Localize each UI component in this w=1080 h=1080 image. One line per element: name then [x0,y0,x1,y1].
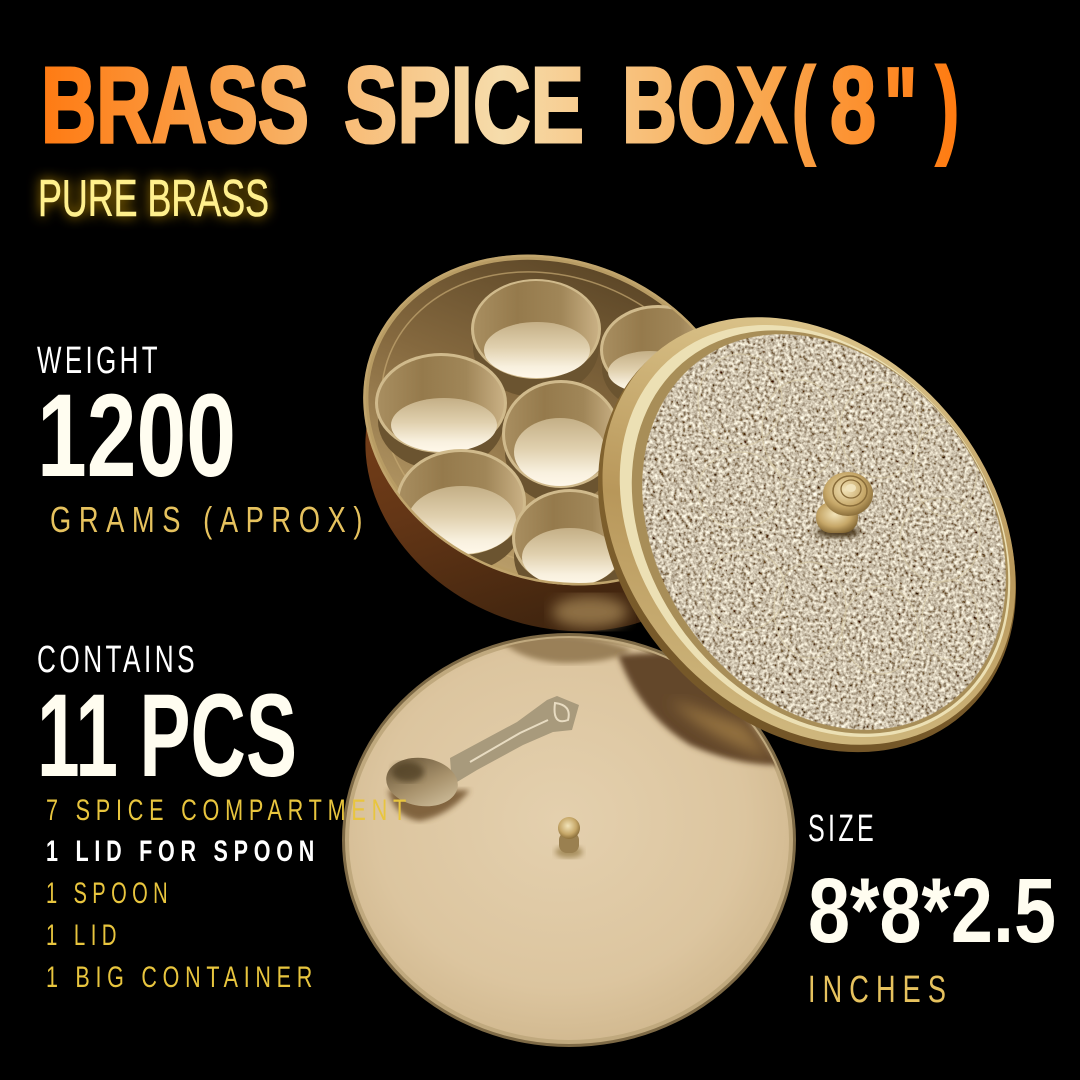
inner wall [320,205,786,635]
photo: bottom plate lid with spoon [342,633,796,1047]
size block [808,808,1056,1011]
title: ) [936,45,959,166]
contains label: CONTAINS [37,639,198,681]
title: 8 [830,44,876,165]
size label: SIZE [808,808,877,850]
compartment: center [502,380,620,504]
piece count: 11 PCS [37,670,297,802]
weight block [37,340,370,540]
plate reflections [500,634,780,765]
container body [315,245,795,687]
weight unit: GRAMS (APROX) [50,499,370,540]
compartment: bottom [512,489,618,586]
contents list: 1 BIG CONTAINER [46,961,318,994]
compartment: top [471,279,601,397]
title: ( [792,45,815,166]
contents list: 1 LID [46,919,122,952]
spoon [383,696,579,821]
lid rim [517,234,1080,828]
contents block [37,639,412,994]
weight label: WEIGHT [37,340,161,382]
lid side wall [512,236,1080,836]
embossed surface [567,264,1080,800]
title: BOX [622,44,787,165]
title [41,44,959,166]
compartment: right [600,305,692,399]
contents list: 7 SPICE COMPARTMENT [46,794,412,827]
title: SPICE [344,44,584,165]
rim [313,199,793,641]
subtitle: PURE BRASS [38,170,269,228]
contents list: 1 SPOON [46,877,173,910]
engraved scrollwork [698,354,980,674]
reflected glow under rim [552,596,628,628]
photo: embossed lid with knob [598,317,1016,752]
compartment: left [375,353,507,470]
contents list: 1 LID FOR SPOON [46,835,320,868]
contents list [46,794,412,994]
photo: open container with seven compartments [363,254,696,632]
unit: INCHES [808,969,953,1011]
title: BRASS [41,44,309,165]
center nub [555,817,583,858]
knob [816,472,873,538]
compartment: lower left [396,449,526,572]
weight value: 1200 [37,370,236,502]
title: " [884,45,917,166]
